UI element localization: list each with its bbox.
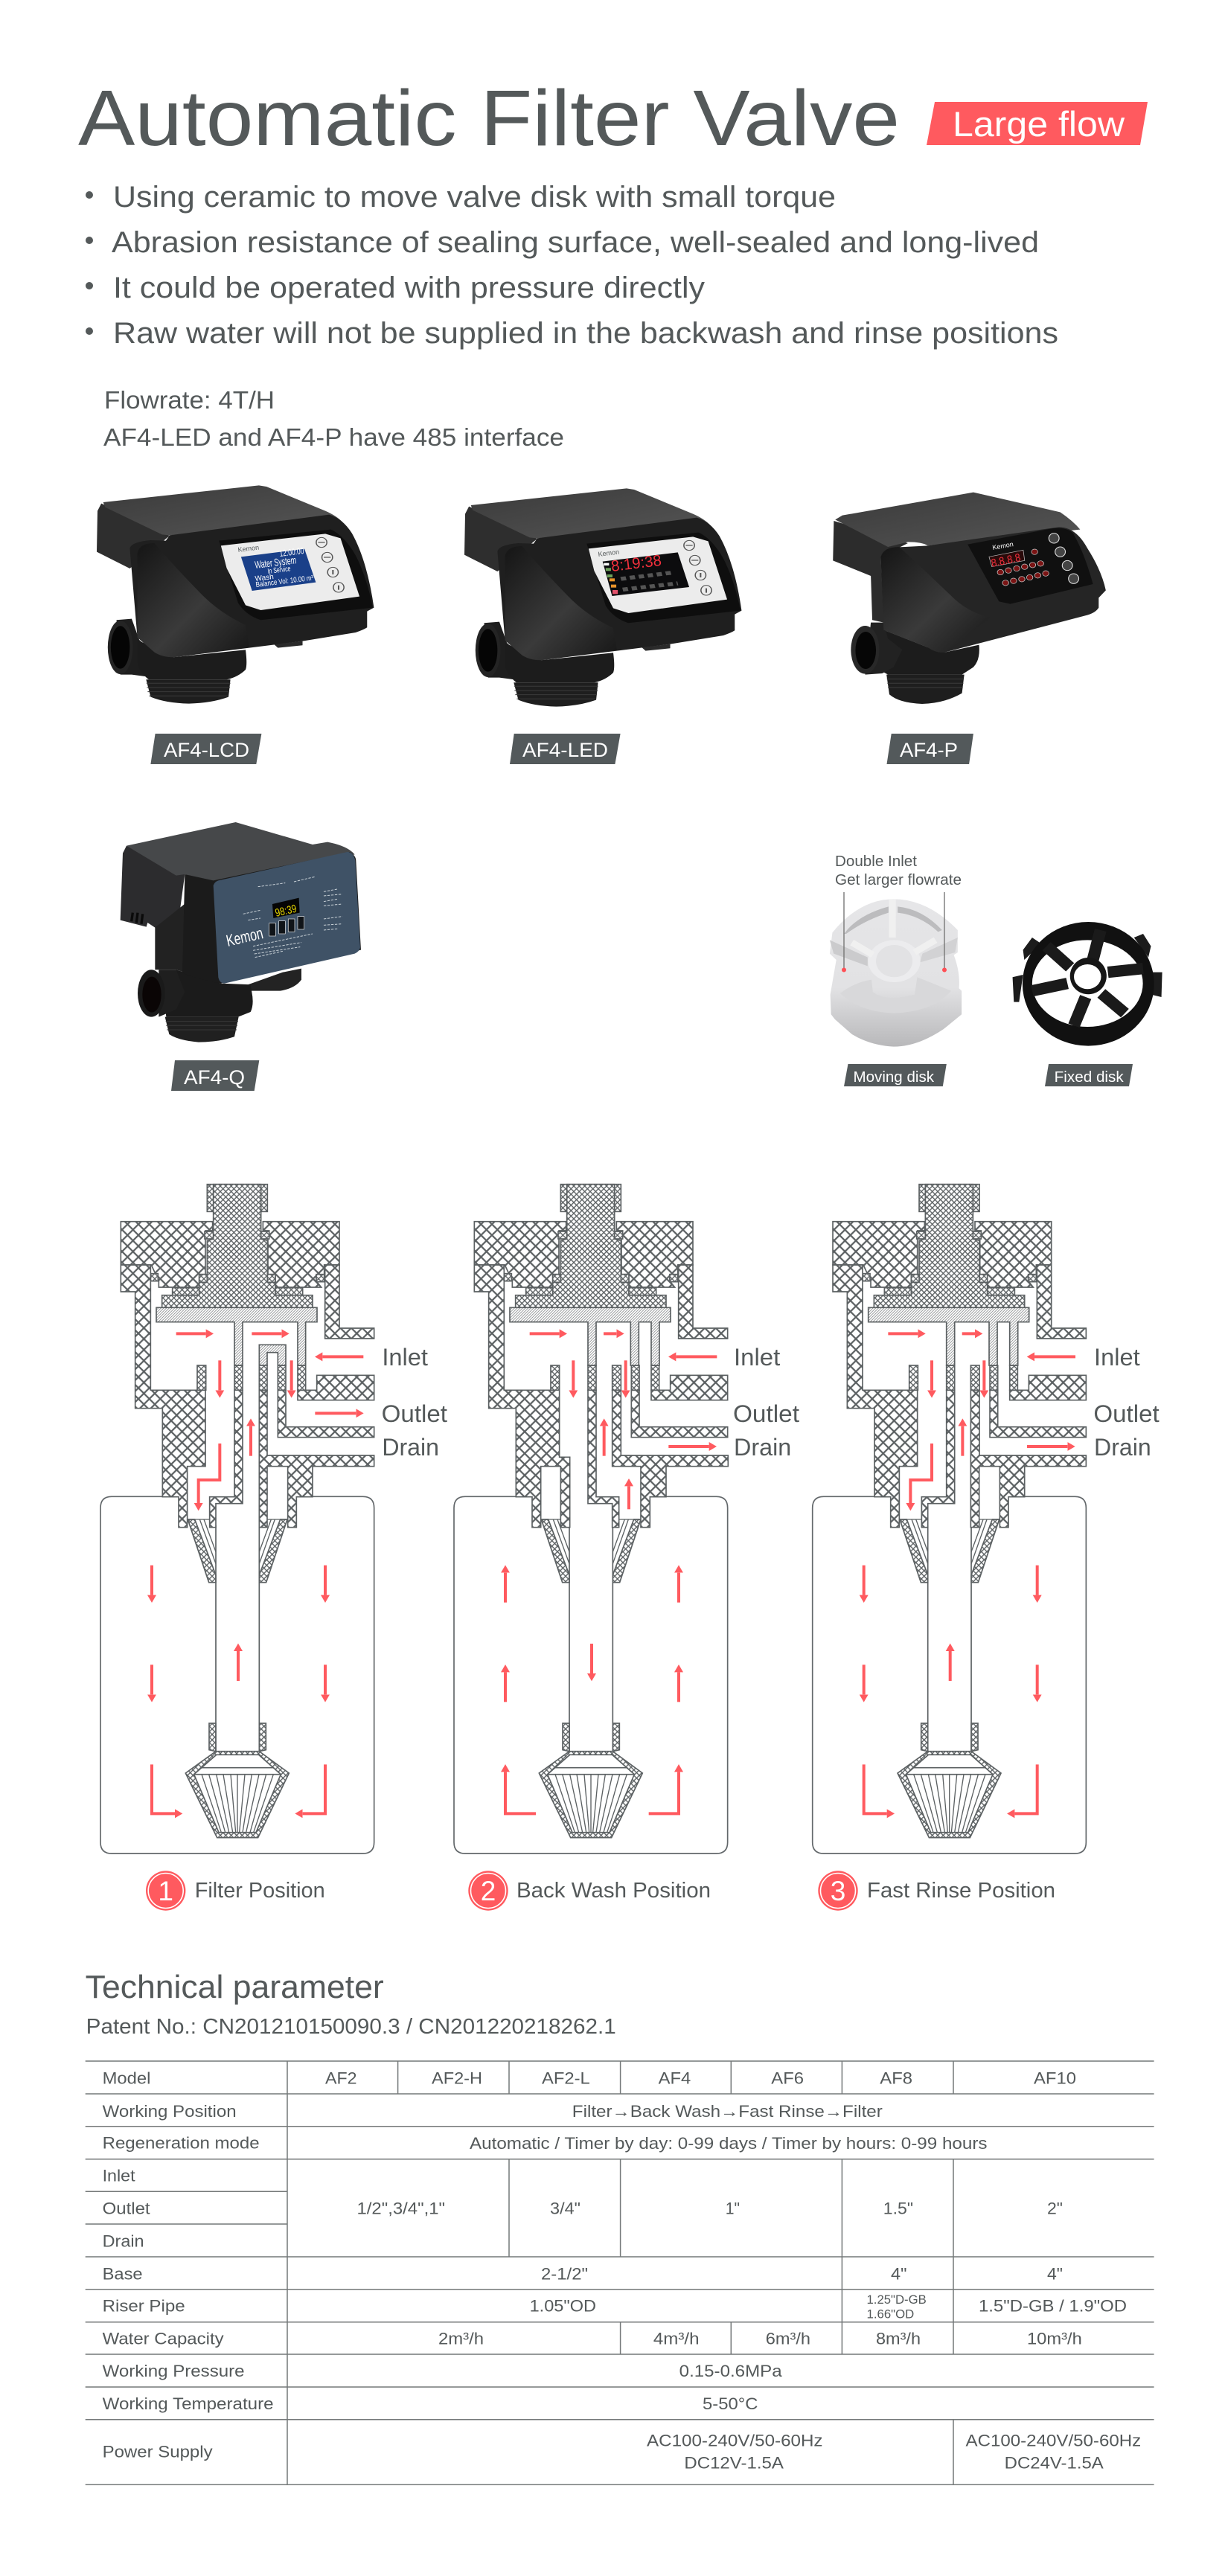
product photo: AF4-Q xyxy=(121,822,361,1042)
row labels: Regeneration mode xyxy=(103,2134,260,2153)
row labels: Working Pressure xyxy=(103,2362,245,2380)
heading: technical parameter: Technical parameter xyxy=(86,1969,384,2005)
label: AF4-Q xyxy=(171,1060,259,1091)
port labels xyxy=(733,1343,799,1461)
product photo: AF4-P: 8.8.8.8 xyxy=(990,551,1022,570)
caption: filter position xyxy=(146,1871,325,1911)
table values: 0.15-0.6MPa xyxy=(679,2362,782,2380)
row labels: Inlet xyxy=(103,2167,135,2185)
row labels: Outlet xyxy=(103,2199,150,2218)
table values: Filter→Back Wash→Fast Rinse→Filter xyxy=(572,2102,883,2121)
product photo: AF4-LCD xyxy=(97,485,374,704)
flow arrows xyxy=(152,1333,363,1813)
table values: 1" xyxy=(726,2199,740,2218)
caption: filter position: 1 xyxy=(158,1876,173,1906)
caption: filter position: Filter Position xyxy=(195,1879,325,1903)
table values: 1.5" xyxy=(883,2199,913,2218)
feature bullet list: It could be operated with pressure directly xyxy=(113,272,705,304)
table values: 10m³/h xyxy=(1027,2330,1082,2348)
caption: fast rinse position xyxy=(818,1871,1055,1911)
badge: large flow xyxy=(927,102,1148,145)
row labels xyxy=(103,2069,274,2461)
port labels xyxy=(382,1343,447,1461)
product photo: AF4-P: Kemon xyxy=(992,540,1014,551)
port labels: Drain xyxy=(382,1433,439,1461)
flowrate note: AF4-LED and AF4-P have 485 interface xyxy=(103,423,564,451)
callout leader lines xyxy=(842,892,947,972)
table values: AF2-L xyxy=(542,2069,590,2088)
label: moving disk xyxy=(844,1064,947,1086)
port labels: Outlet xyxy=(733,1400,799,1427)
label: fixed disk: Fixed disk xyxy=(1055,1068,1124,1086)
title: Automatic Filter Valve xyxy=(78,74,900,162)
product photo: AF4-LCD: In Service xyxy=(267,565,291,576)
diagram: fast rinse position xyxy=(813,1185,1160,1853)
table values: 1.05"OD xyxy=(530,2297,596,2316)
label: AF4-LED: AF4-LED xyxy=(522,739,608,761)
label: fixed disk xyxy=(1045,1064,1133,1086)
port labels: Inlet xyxy=(1094,1343,1140,1371)
port labels: Inlet xyxy=(382,1343,428,1371)
product photo: AF4-LCD: Balance Vol: 10.00 m³ xyxy=(255,574,314,589)
table values: AF4 xyxy=(659,2069,691,2088)
table values: AF8 xyxy=(880,2069,912,2088)
diagram: filter position xyxy=(100,1185,447,1853)
table values: DC24V-1.5A xyxy=(1005,2454,1104,2473)
left wall and tube xyxy=(474,1265,728,1528)
table values: 2" xyxy=(1047,2199,1063,2218)
moving disk callout text xyxy=(835,853,962,888)
feature bullet list: Raw water will not be supplied in the backwash and rinse positions xyxy=(113,317,1058,350)
product photo: AF4-LED xyxy=(464,488,741,707)
product photo: AF4-Q: Kemon xyxy=(225,923,265,950)
table values: 4m³/h xyxy=(653,2330,700,2348)
table values: 1.66"OD xyxy=(866,2308,914,2322)
table values: DC12V-1.5A xyxy=(684,2454,784,2473)
port labels: Outlet xyxy=(382,1400,447,1427)
product photo: AF4-LED: 8:19:38 xyxy=(610,552,662,575)
label: AF4-LED xyxy=(510,734,621,764)
flow arrows xyxy=(864,1333,1075,1813)
table values: 4" xyxy=(1047,2264,1063,2283)
flowrate note xyxy=(103,386,564,451)
badge: large flow: Large flow xyxy=(953,104,1125,144)
port labels: Outlet xyxy=(1093,1400,1160,1427)
table values: AC100-240V/50-60Hz xyxy=(647,2431,823,2450)
table values: AF2 xyxy=(325,2069,357,2088)
moving disk callout text: Double Inlet xyxy=(835,853,917,870)
patent number: Patent No.: CN201210150090.3 / CN201220218262.1 xyxy=(86,2015,616,2039)
label: AF4-P xyxy=(887,734,973,764)
product photo: AF4-P xyxy=(833,493,1106,704)
table values: 6m³/h xyxy=(766,2330,810,2348)
table values: 3/4" xyxy=(550,2199,580,2218)
table values: 2-1/2" xyxy=(541,2264,588,2283)
caption: back wash position: Back Wash Position xyxy=(516,1879,711,1903)
table values: AF2-H xyxy=(432,2069,482,2088)
row labels: Working Position xyxy=(103,2102,237,2121)
moving disk callout text: Get larger flowrate xyxy=(835,871,962,888)
caption: back wash position: 2 xyxy=(481,1876,496,1906)
table values: 8m³/h xyxy=(876,2330,921,2348)
product photo: AF4-LCD: Kemon xyxy=(237,544,260,554)
label: AF4-LCD xyxy=(150,734,261,764)
feature bullet list xyxy=(86,181,1058,350)
technical parameter table xyxy=(86,2061,1154,2484)
moving disk photo xyxy=(830,899,962,1047)
caption: back wash position xyxy=(468,1871,711,1911)
drain wall xyxy=(970,1390,1086,1528)
row labels: Base xyxy=(103,2264,143,2283)
flowrate note: Flowrate: 4T/H xyxy=(104,386,275,414)
table values: AC100-240V/50-60Hz xyxy=(966,2431,1141,2450)
table values: 1.5"D-GB / 1.9"OD xyxy=(979,2297,1127,2316)
port labels: Drain xyxy=(1094,1433,1151,1461)
table values: 1.25"D-GB xyxy=(866,2293,927,2307)
feature bullet list: Using ceramic to move valve disk with small torque xyxy=(113,181,836,214)
flow arrows xyxy=(505,1333,717,1813)
product photo: AF4-LCD: 12:00:00 xyxy=(279,545,304,559)
label: AF4-P: AF4-P xyxy=(900,739,958,761)
feature bullet list: Abrasion resistance of sealing surface, well-sealed and long-lived xyxy=(112,226,1039,259)
diagram: back wash position xyxy=(454,1185,799,1853)
product photo: AF4-LCD: Water System xyxy=(254,554,297,571)
table values: AF10 xyxy=(1034,2069,1076,2088)
table values: Automatic / Timer by day: 0-99 days / Timer by hours: 0-99 hours xyxy=(470,2134,987,2153)
inner baffle xyxy=(259,1345,286,1390)
row labels: Water Capacity xyxy=(103,2330,224,2348)
table grid xyxy=(86,2061,1154,2484)
row labels: Drain xyxy=(103,2231,144,2250)
product photo: AF4-Q: 98:39 xyxy=(274,903,298,920)
table values: 1/2",3/4",1" xyxy=(357,2199,445,2218)
label: moving disk: Moving disk xyxy=(853,1068,935,1086)
table values: AF6 xyxy=(771,2069,804,2088)
table values: 5-50°C xyxy=(703,2394,758,2413)
label: AF4-Q: AF4-Q xyxy=(184,1066,245,1089)
row labels: Riser Pipe xyxy=(103,2297,185,2316)
table values: 2m³/h xyxy=(438,2330,484,2348)
row labels: Power Supply xyxy=(103,2443,213,2461)
product photo: AF4-LCD: Wash xyxy=(255,573,274,583)
port labels: Drain xyxy=(734,1433,791,1461)
table values xyxy=(325,2069,1141,2473)
port labels: Inlet xyxy=(734,1343,780,1371)
table values: 4" xyxy=(891,2264,906,2283)
port labels xyxy=(1093,1343,1160,1461)
caption: fast rinse position: 3 xyxy=(831,1876,845,1906)
label: AF4-LCD: AF4-LCD xyxy=(164,739,249,761)
row labels: Working Temperature xyxy=(103,2394,274,2413)
row labels: Model xyxy=(103,2069,150,2088)
fixed disk photo xyxy=(1013,922,1162,1046)
caption: fast rinse position: Fast Rinse Position xyxy=(867,1879,1055,1903)
product photo: AF4-LED: Kemon xyxy=(598,548,620,558)
